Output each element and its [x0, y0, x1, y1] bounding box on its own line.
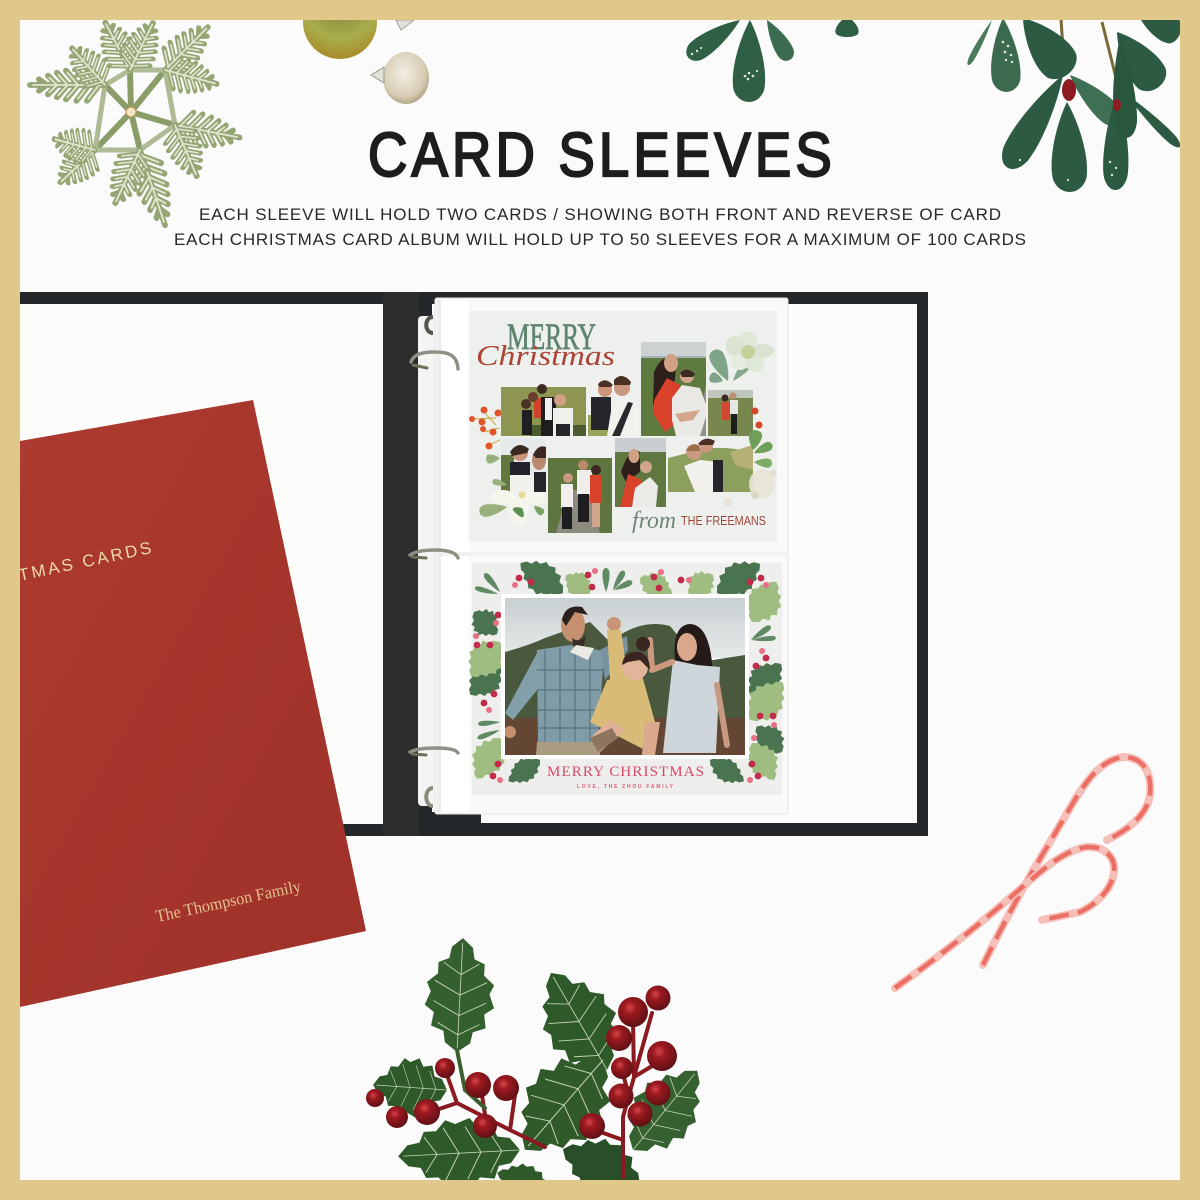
snowflake ornament — [30, 15, 243, 230]
photo: mother and son — [615, 438, 666, 507]
trees and field — [505, 622, 745, 755]
binder cover — [20, 292, 928, 836]
berries — [366, 986, 677, 1139]
album title: TMAS CARDS — [17, 538, 153, 585]
plate end top — [426, 317, 433, 333]
photo: family on path — [548, 458, 612, 533]
man — [504, 607, 628, 755]
binder spine — [383, 292, 419, 836]
woman — [650, 624, 727, 753]
card 2: holly border photo card — [457, 550, 796, 795]
holly branch with red berries — [366, 936, 722, 1200]
holly leaves — [371, 936, 722, 1200]
left inner page — [20, 304, 383, 824]
bottom spine shadow — [419, 812, 481, 824]
photo: boy and father close up — [501, 445, 546, 492]
photo: boys hugging in field — [668, 438, 753, 492]
binder rings — [410, 352, 458, 755]
family photo — [505, 598, 745, 755]
white photo frame — [501, 594, 749, 759]
heading: MERRY: MERRY — [507, 317, 596, 358]
mistletoe sprig, top right — [965, 5, 1185, 193]
red berry — [1062, 79, 1076, 101]
ring mechanism plate — [418, 316, 436, 806]
silver bauble — [371, 20, 429, 104]
card greeting: MERRY CHRISTMAS — [547, 764, 704, 780]
card family line: LOVE, THE ZHOU FAMILY — [577, 784, 674, 790]
right inner page — [432, 304, 917, 823]
open binder — [20, 292, 928, 836]
right edge berries and leaves — [724, 408, 776, 506]
holly border berries — [473, 568, 777, 783]
subtitle text block: EACH CHRISTMAS CARD ALBUM WILL HOLD UP TO 50 SLEEVES FOR A MAXIMUM OF 100 CARDS — [174, 230, 1026, 249]
candy cane B — [983, 757, 1150, 965]
holly border leaves — [457, 550, 796, 791]
photo: small couple portrait — [708, 390, 753, 436]
red album cover — [17, 400, 366, 1007]
subtitle text block: EACH SLEEVE WILL HOLD TWO CARDS / SHOWING BOTH FRONT AND REVERSE OF CARD — [199, 205, 1001, 224]
candy canes — [895, 757, 1150, 988]
girl — [590, 617, 660, 755]
title: CARD SLEEVES — [368, 121, 832, 190]
signature: THE FREEMANS: THE FREEMANS — [681, 513, 766, 528]
orange berries sprig — [469, 406, 502, 450]
photo: couple and child in grass — [501, 384, 586, 436]
signature: from: from — [632, 508, 676, 534]
sky — [505, 598, 745, 658]
subtitle text block — [174, 205, 1026, 249]
branch stems — [430, 1013, 662, 1177]
card 1: Merry Christmas collage — [469, 311, 777, 542]
plate end bottom — [426, 788, 433, 806]
flower and leaves — [707, 332, 774, 386]
mistletoe sprig, centre — [682, 11, 859, 102]
candy cane A — [895, 847, 1114, 988]
photo: mother hugging son — [641, 342, 706, 436]
plastic sleeves — [435, 298, 788, 814]
photo: father and son — [588, 376, 633, 436]
white flower bottom left — [478, 453, 546, 525]
album family name: The Thompson Family — [154, 876, 303, 926]
heading: Christmas script: Christmas — [476, 340, 615, 372]
green bauble — [303, 0, 377, 59]
